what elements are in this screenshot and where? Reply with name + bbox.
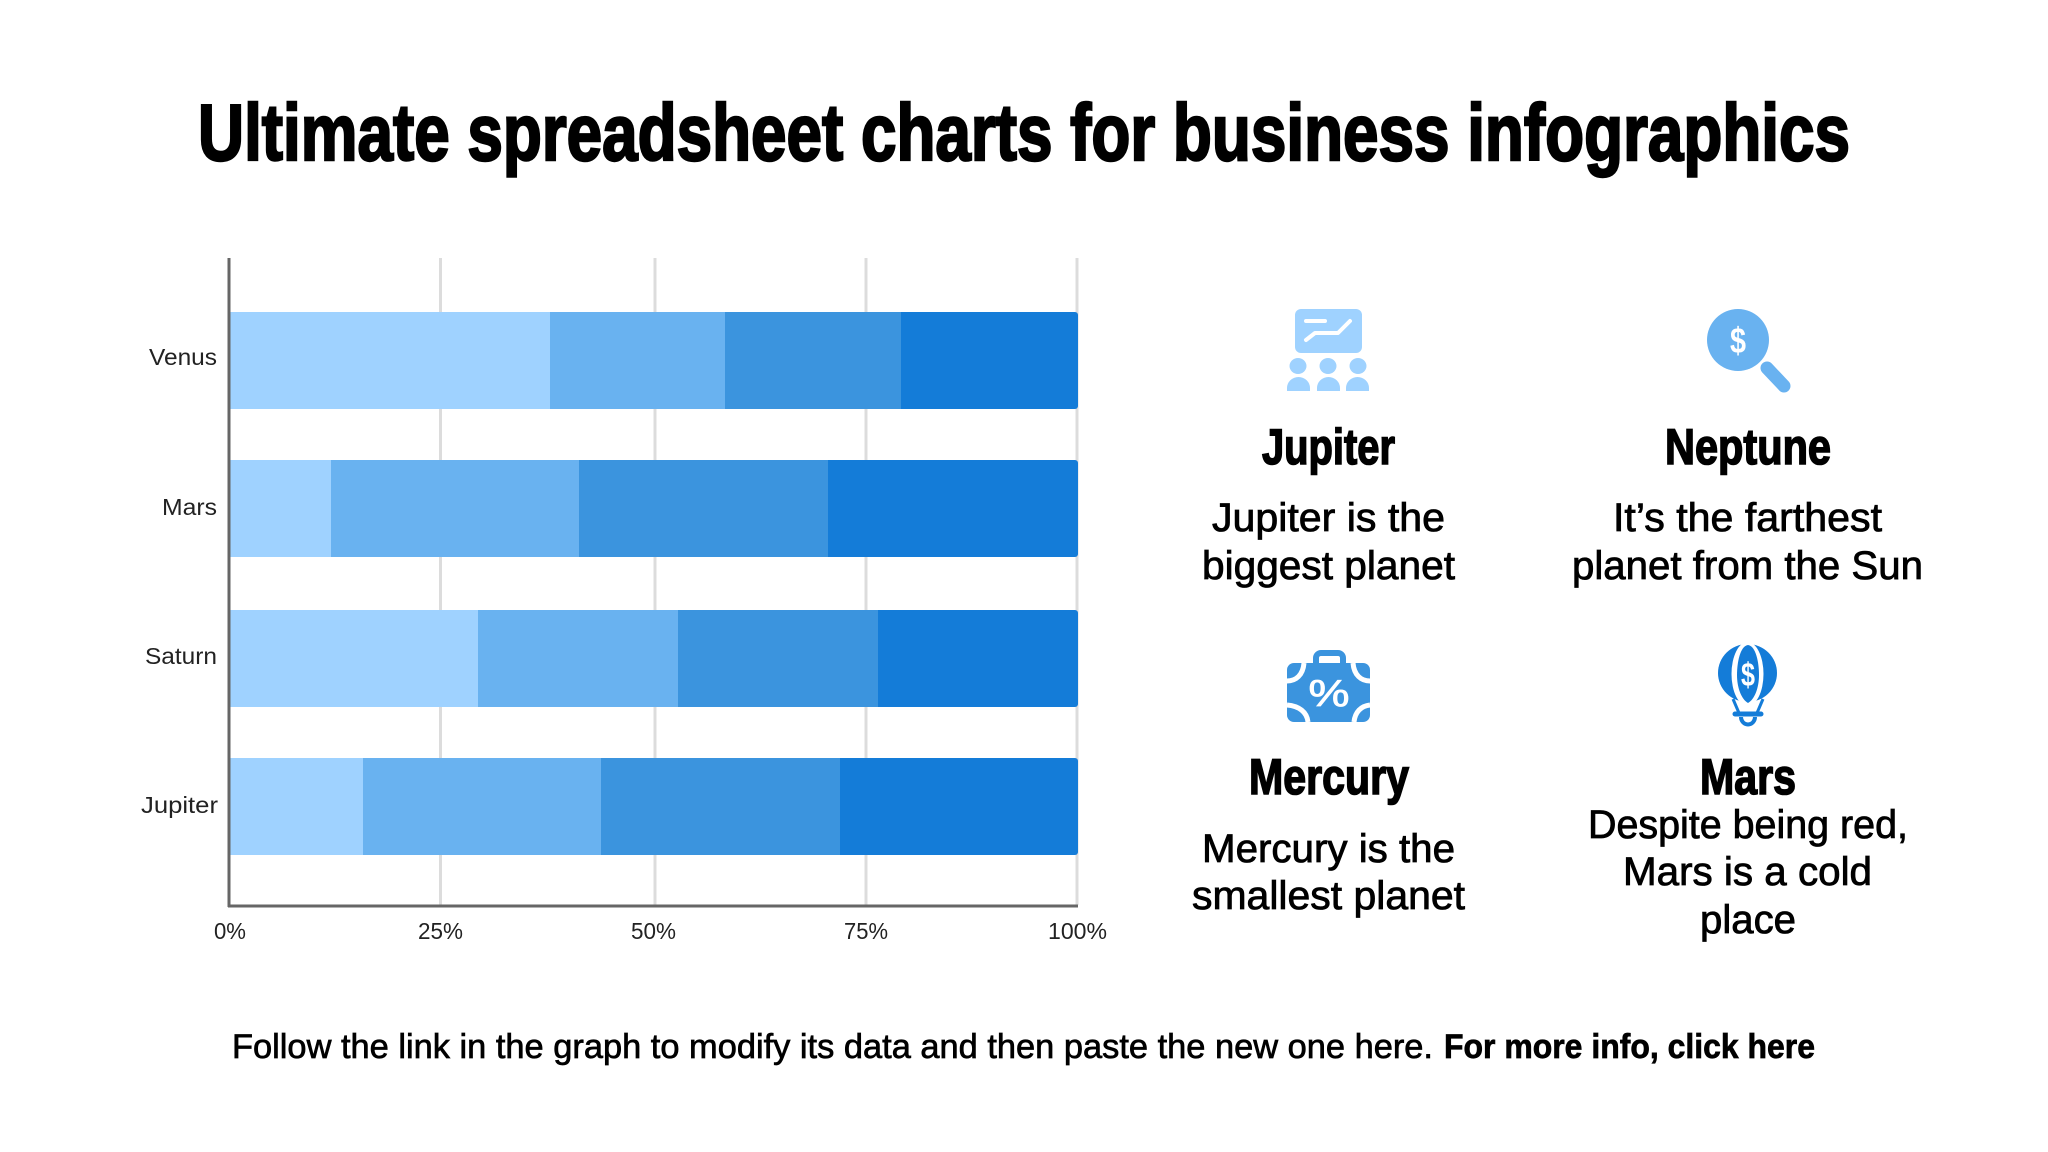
value axis labels: 0% bbox=[214, 918, 246, 944]
panel: Jupiter bbox=[1202, 309, 1455, 588]
icon: magnifier with dollar bbox=[1707, 309, 1784, 386]
value axis labels: 25% bbox=[418, 918, 463, 944]
description bbox=[1572, 496, 1923, 588]
description: smallest planet bbox=[1192, 874, 1465, 918]
stacked bar chart bbox=[141, 258, 1107, 944]
axes bbox=[228, 258, 1078, 907]
description: Jupiter is the bbox=[1212, 496, 1445, 540]
icon: hot air balloon with dollar bbox=[1718, 642, 1777, 725]
description: planet from the Sun bbox=[1572, 544, 1923, 588]
description: place bbox=[1700, 898, 1796, 942]
category labels: Venus bbox=[149, 344, 217, 370]
footer note: Follow the link in the graph to modify its data and then paste the new one here. bbox=[232, 1028, 1433, 1066]
heading: Mercury bbox=[1249, 749, 1409, 805]
value axis labels: 75% bbox=[844, 918, 888, 944]
description: Mercury is the bbox=[1202, 827, 1455, 871]
description: biggest planet bbox=[1202, 544, 1455, 588]
icon: presentation board with audience bbox=[1287, 309, 1369, 391]
category labels: Mars bbox=[162, 494, 217, 520]
icon: hot air balloon with dollar: $ bbox=[1741, 656, 1755, 693]
panel: Mars bbox=[1588, 642, 1908, 942]
description bbox=[1202, 496, 1455, 588]
footer note: For more info, click here bbox=[1444, 1028, 1815, 1066]
heading: Neptune bbox=[1665, 419, 1831, 475]
category labels: Jupiter bbox=[141, 792, 218, 818]
icon: magnifier with dollar: $ bbox=[1730, 320, 1746, 361]
description bbox=[1192, 827, 1465, 918]
panel: Mercury bbox=[1192, 653, 1465, 918]
panel: Neptune bbox=[1572, 309, 1923, 588]
icon: suitcase with percent: % bbox=[1308, 673, 1350, 715]
bar: Mars bbox=[229, 460, 1078, 557]
value axis labels bbox=[214, 918, 1107, 944]
value axis labels: 50% bbox=[631, 918, 676, 944]
category labels bbox=[141, 344, 218, 818]
heading: Jupiter bbox=[1262, 419, 1395, 475]
bar: Saturn bbox=[229, 610, 1078, 707]
category labels: Saturn bbox=[145, 643, 217, 669]
bar: Venus bbox=[229, 312, 1078, 409]
description: It’s the farthest bbox=[1613, 496, 1882, 540]
heading: Mars bbox=[1700, 749, 1796, 805]
icon: suitcase with percent bbox=[1287, 653, 1370, 722]
value axis labels: 100% bbox=[1048, 918, 1107, 944]
description: Despite being red, bbox=[1588, 803, 1908, 847]
description: Mars is a cold bbox=[1623, 850, 1872, 894]
description bbox=[1588, 803, 1908, 942]
bar: Jupiter bbox=[229, 758, 1078, 855]
